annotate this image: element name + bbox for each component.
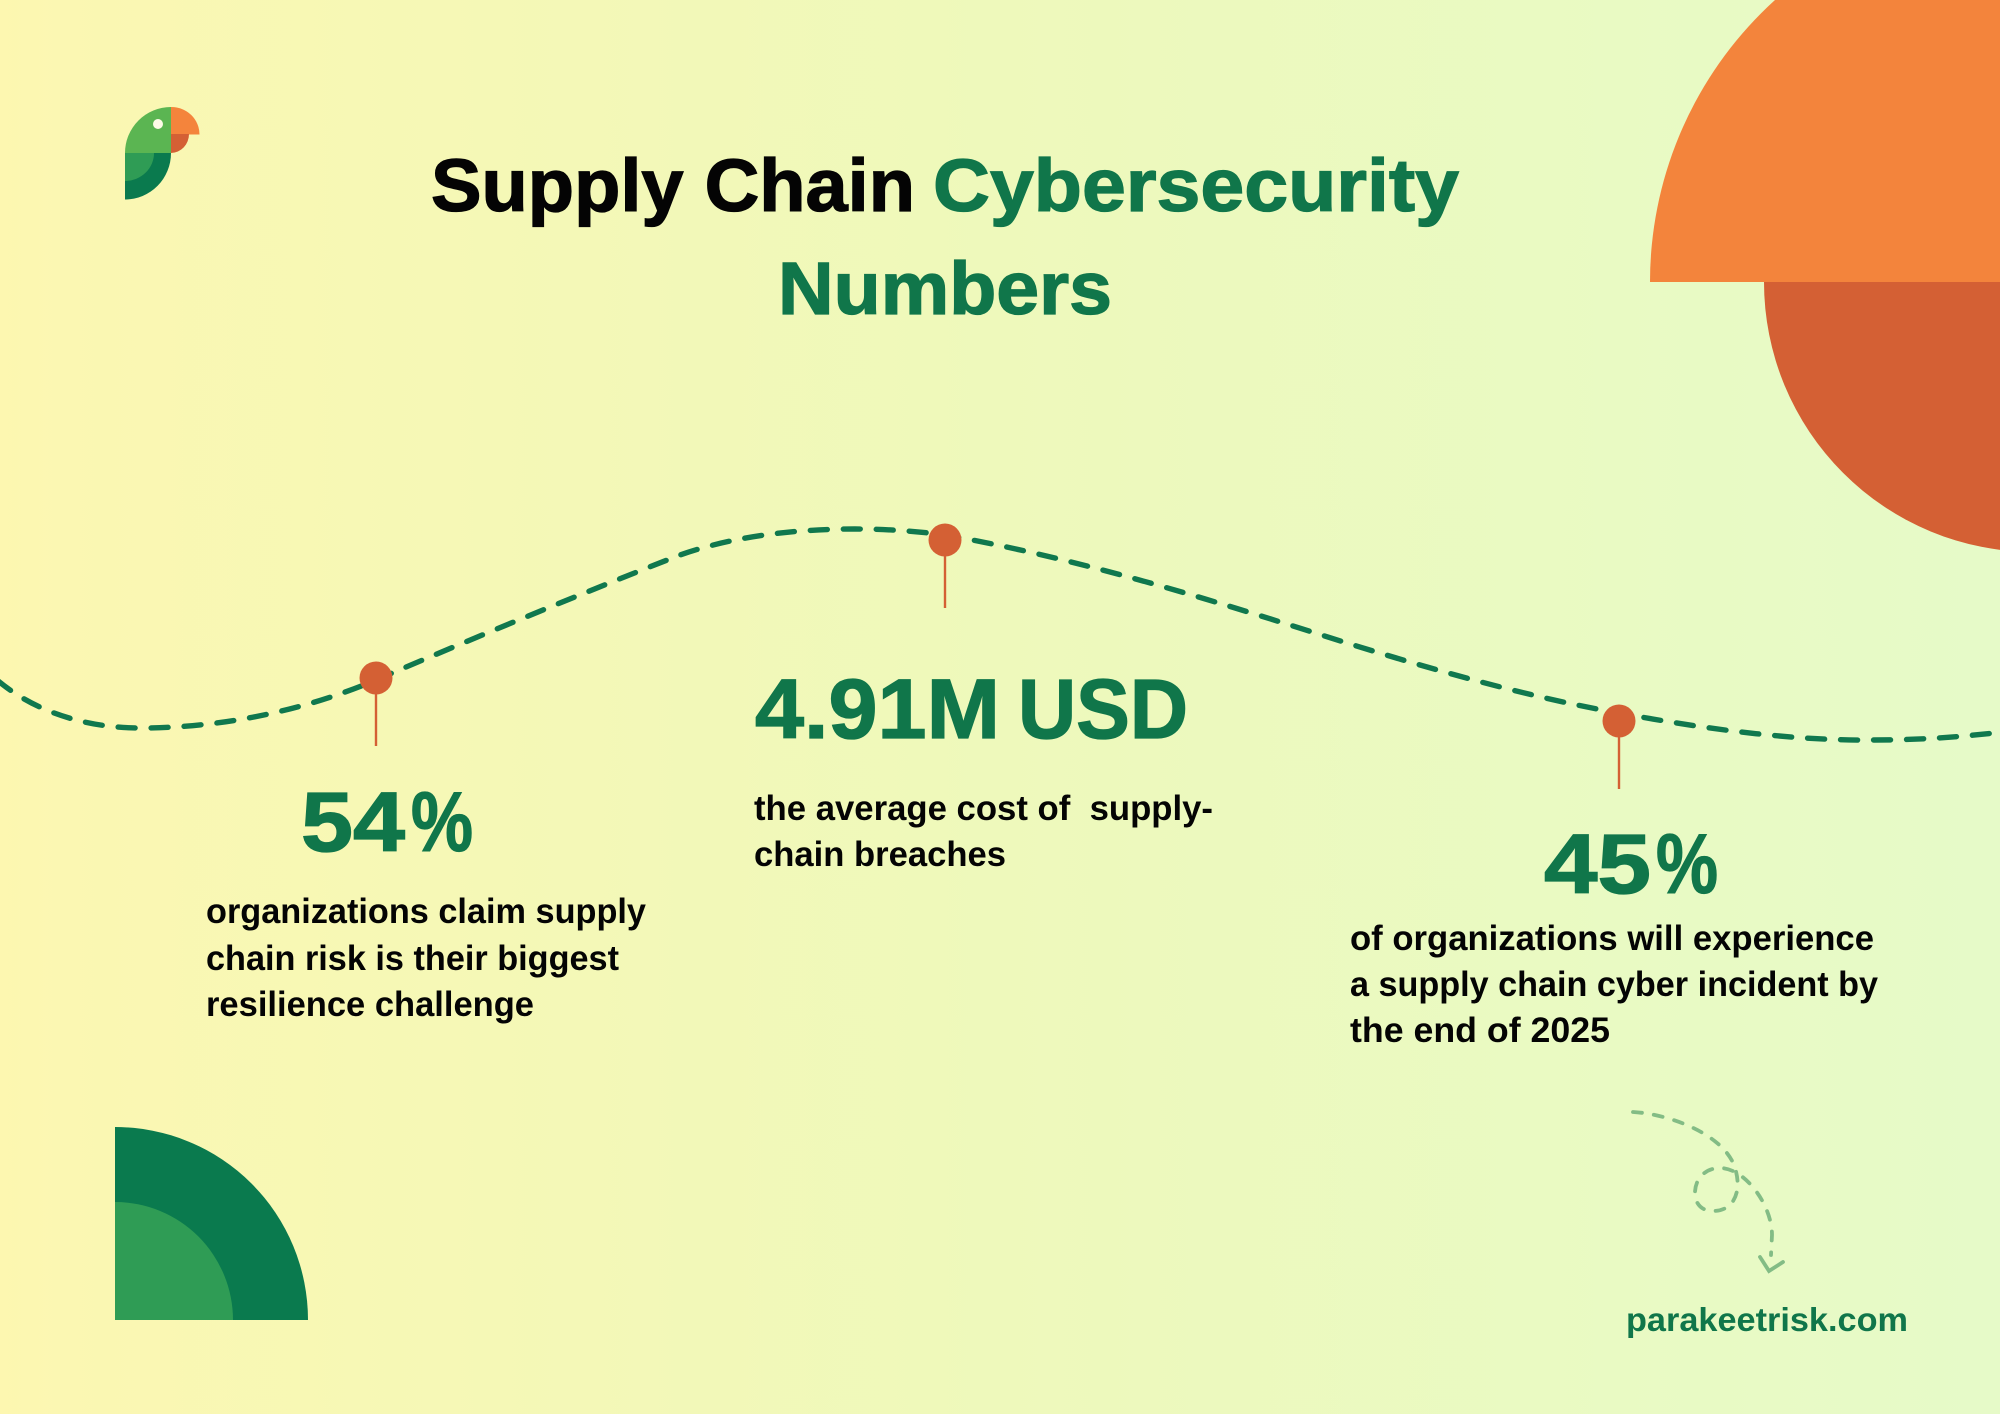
icon: parakeet logo — [125, 107, 200, 200]
stat description: the average cost of supply- — [754, 789, 1213, 828]
arrow: looping dashed arrow to website — [1633, 1112, 1783, 1271]
stat description: resilience challenge — [206, 985, 534, 1024]
stat description — [206, 892, 647, 1024]
dashed wave line — [0, 529, 2000, 740]
stat unit USD: USD — [1018, 662, 1188, 756]
stat description: the end of 2025 — [1350, 1011, 1610, 1050]
stat description — [1350, 919, 1879, 1050]
stat value 45%: 45 — [1544, 817, 1651, 911]
pin: 54% marker — [360, 662, 392, 746]
stat: 54% — [206, 775, 647, 1024]
stat value 4.91M: 4.91M — [755, 662, 1000, 756]
stat value 54%: % — [411, 775, 473, 869]
stat description: organizations claim supply — [206, 892, 647, 931]
title: Numbers — [778, 247, 1112, 330]
pin: 45% marker — [1602, 704, 1636, 789]
stat value 54%: 54 — [301, 775, 405, 869]
stat value 45%: % — [1656, 817, 1718, 911]
pin: 4.91M USD marker — [928, 524, 962, 608]
title — [431, 144, 1460, 330]
title: Supply Chain — [431, 144, 915, 227]
website url: parakeetrisk.com — [1626, 1301, 1908, 1338]
stat description: chain breaches — [754, 835, 1006, 874]
stat: 45% — [1350, 817, 1879, 1050]
stat: 4.91M USD — [754, 662, 1213, 874]
title: Cybersecurity — [933, 144, 1460, 227]
stat description — [754, 789, 1213, 874]
decoration: bottom-left green quarter circles — [115, 1127, 308, 1320]
decoration: top-right orange and red semicircles — [1650, 0, 2000, 552]
stat description: a supply chain cyber incident by — [1350, 965, 1879, 1004]
stat description: chain risk is their biggest — [206, 939, 619, 978]
stat description: of organizations will experience — [1350, 919, 1874, 958]
